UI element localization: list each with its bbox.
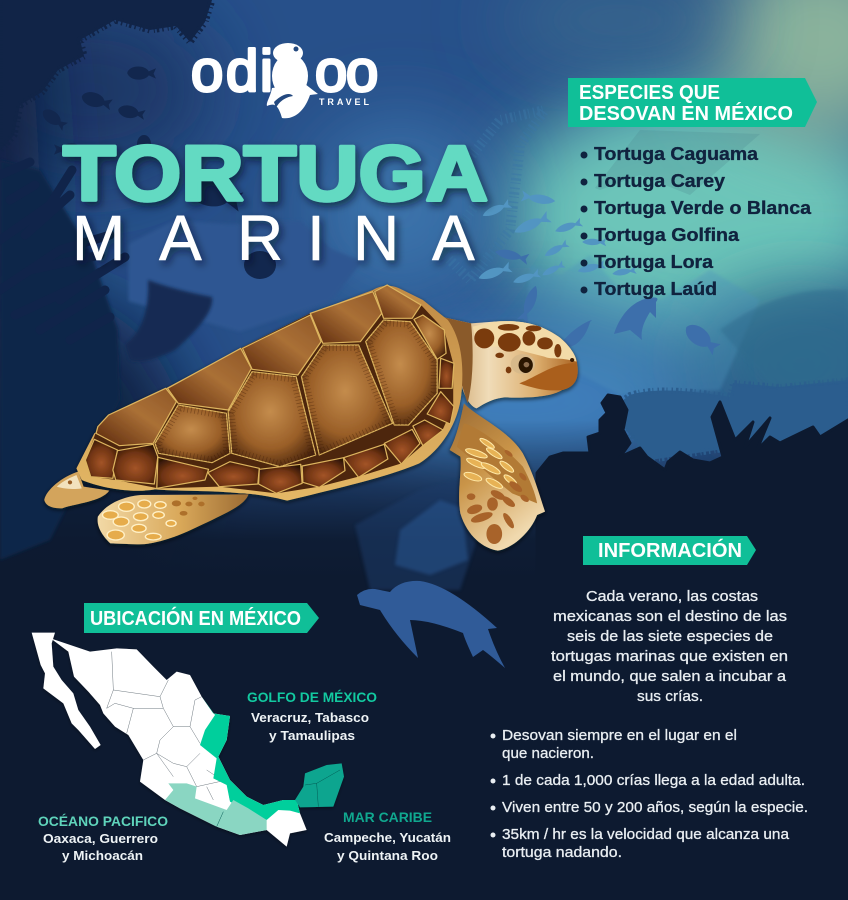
facts list: Viven entre 50 y 200 años, según la especie. xyxy=(502,799,808,816)
fish schools xyxy=(40,66,760,356)
label: Pacific Ocean: Oaxaca, Guerrero xyxy=(43,831,158,846)
species names: Tortuga Laúd xyxy=(594,278,717,299)
heading ribbon: species xyxy=(568,78,817,127)
logo: odigoo travel xyxy=(191,39,378,118)
carapace xyxy=(76,285,462,501)
heading ribbon: species: ESPECIES QUE xyxy=(579,82,720,104)
panel: species list xyxy=(568,78,817,299)
facts list: 35km / hr es la velocidad que alcanza una xyxy=(502,826,790,843)
head and neck xyxy=(441,317,578,408)
icon: parrot xyxy=(267,43,318,118)
label: Pacific Ocean: y Michoacán xyxy=(62,848,143,863)
species names: Tortuga Carey xyxy=(594,170,726,191)
panel: information xyxy=(490,536,808,861)
label: Pacific Ocean: OCÉANO PACIFICO xyxy=(38,813,168,829)
rear flipper tip xyxy=(44,472,109,508)
silhouette: swimming turtle xyxy=(357,581,505,668)
coral silhouettes xyxy=(0,0,848,600)
title: MARINA xyxy=(72,202,475,274)
state borders xyxy=(107,652,230,800)
Gulf states xyxy=(200,697,300,820)
heading ribbon: information xyxy=(583,536,756,565)
species names: Tortuga Golfina xyxy=(594,224,740,245)
species names: Tortuga Caguama xyxy=(594,143,759,164)
intro paragraph: el mundo, que salen a incubar a xyxy=(553,668,787,685)
species names: Tortuga Lora xyxy=(594,251,714,272)
label: Gulf of Mexico xyxy=(247,689,377,743)
logo: odigoo travel: odi xyxy=(191,39,273,104)
label: Gulf of Mexico: GOLFO DE MÉXICO xyxy=(247,689,377,705)
label: Caribbean Sea xyxy=(324,809,451,863)
label: Gulf of Mexico: Veracruz, Tabasco xyxy=(251,710,369,725)
label: Caribbean Sea: MAR CARIBE xyxy=(343,809,432,825)
title: TORTUGA xyxy=(63,129,488,217)
intro paragraph: mexicanas son el destino de las xyxy=(553,608,787,625)
facts list: Desovan siempre en el lugar en el xyxy=(502,727,737,744)
Baja California xyxy=(32,633,101,749)
intro paragraph: tortugas marinas que existen en xyxy=(551,648,788,665)
facts list: tortuga nadando. xyxy=(502,844,622,861)
hind flipper xyxy=(98,494,249,544)
label: Pacific Ocean xyxy=(38,813,168,863)
title xyxy=(63,129,488,274)
label: Caribbean Sea: y Quintana Roo xyxy=(337,848,438,863)
logo: odigoo travel: TRAVEL xyxy=(319,97,370,107)
heading ribbon: species: DESOVAN EN MÉXICO xyxy=(579,102,793,125)
Caribbean states xyxy=(295,763,344,807)
facts list: que nacieron. xyxy=(502,745,594,762)
label: Gulf of Mexico: y Tamaulipas xyxy=(269,728,355,743)
intro paragraph: seis de las siete especies de xyxy=(567,628,773,645)
heading ribbon: information: INFORMACIÓN xyxy=(598,538,742,562)
facts list: 1 de cada 1,000 crías llega a la edad adulta. xyxy=(502,772,805,789)
illustration: sea turtle xyxy=(44,285,578,551)
front flipper xyxy=(450,403,545,551)
map of Mexico xyxy=(32,633,344,847)
Pacific states xyxy=(165,783,267,835)
panel: location in Mexico xyxy=(32,603,451,863)
logo: odigoo travel: oo xyxy=(315,39,378,104)
intro paragraph: sus crías. xyxy=(637,688,703,705)
intro paragraph xyxy=(551,588,788,705)
mainland and Chiapas xyxy=(51,638,307,847)
species names: Tortuga Verde o Blanca xyxy=(594,197,812,218)
species names xyxy=(580,143,812,299)
facts list xyxy=(490,727,808,861)
intro paragraph: Cada verano, las costas xyxy=(586,588,758,605)
heading ribbon: location: UBICACIÓN EN MÉXICO xyxy=(90,606,301,630)
label: Caribbean Sea: Campeche, Yucatán xyxy=(324,830,451,845)
